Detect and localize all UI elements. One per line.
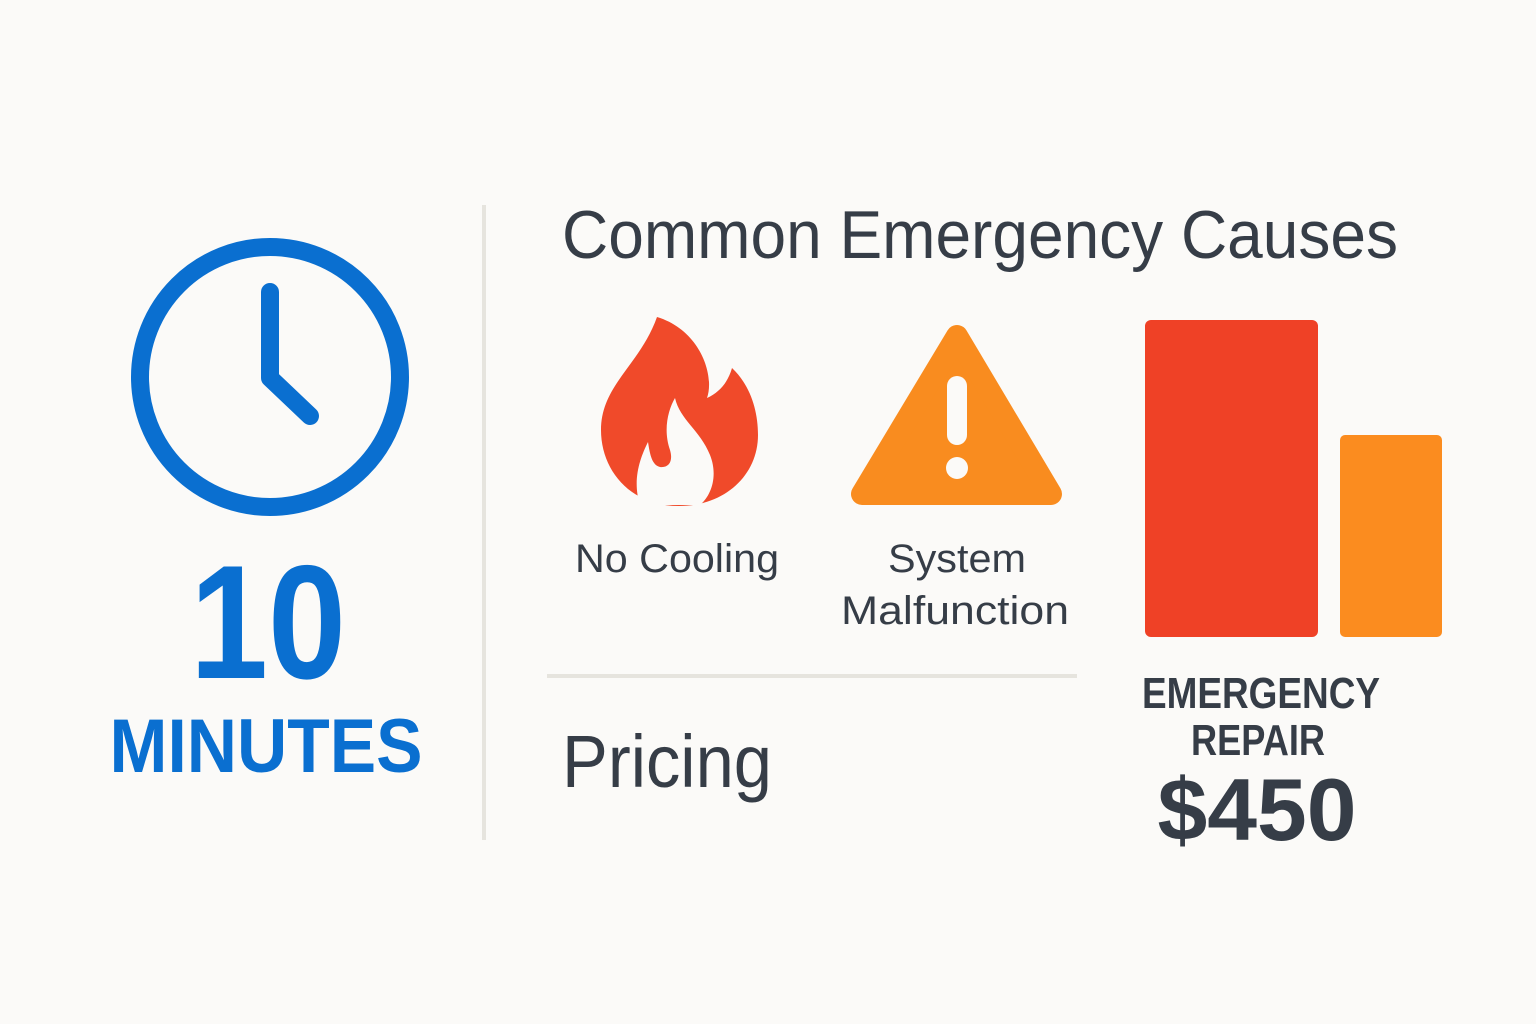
icon: warning triangle — [862, 336, 1051, 494]
icon: flame — [601, 317, 758, 506]
heading: Pricing: Pricing — [562, 720, 772, 803]
heading: Common Emergency Causes: Common Emergency Causes — [562, 197, 1398, 273]
stat number: 10: 10 — [190, 532, 346, 713]
bar chart — [1145, 320, 1442, 637]
label: System Malfunction: Malfunction — [841, 589, 1069, 633]
label: EMERGENCY REPAIR: EMERGENCY — [1142, 669, 1380, 718]
label: EMERGENCY REPAIR: REPAIR — [1191, 716, 1325, 765]
label: System Malfunction: System — [888, 537, 1026, 581]
price: $450: $450 — [1158, 760, 1356, 859]
label: System Malfunction — [841, 537, 1069, 633]
stat label: MINUTES: MINUTES — [110, 704, 422, 789]
icon: clock — [140, 247, 400, 507]
label: No Cooling: No Cooling — [575, 537, 779, 581]
label: EMERGENCY REPAIR — [1142, 669, 1380, 765]
